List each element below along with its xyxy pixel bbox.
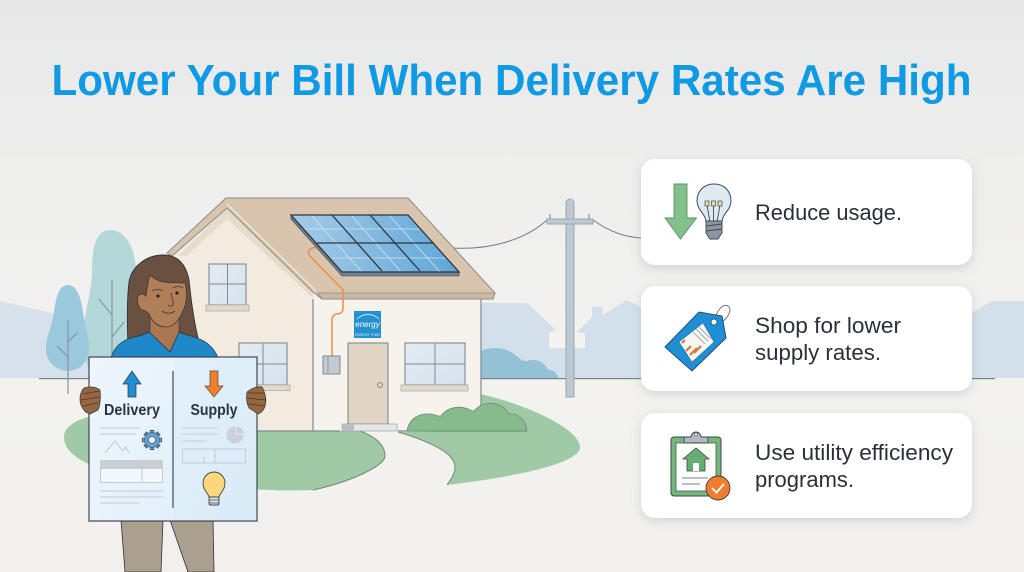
house walls xyxy=(100,208,527,431)
down arrow xyxy=(205,371,223,397)
face xyxy=(137,275,187,327)
trees xyxy=(46,230,146,394)
shirt xyxy=(111,332,218,358)
text xyxy=(755,440,953,492)
neck xyxy=(150,316,179,352)
door xyxy=(342,343,397,431)
energy star label xyxy=(354,311,381,338)
card: use utility efficiency programs xyxy=(641,413,972,518)
lower left window xyxy=(236,343,290,390)
card: reduce usage xyxy=(641,159,972,265)
energy star label: ENERGY STAR xyxy=(355,333,380,337)
text: Shop for lower xyxy=(755,313,901,338)
utility pole and wires xyxy=(453,199,641,397)
gable trim xyxy=(178,208,313,298)
text: Use utility efficiency xyxy=(755,440,953,465)
right hand xyxy=(247,387,266,414)
hair xyxy=(127,255,199,345)
roof xyxy=(167,198,495,299)
delivery column xyxy=(100,371,163,503)
icon: clipboard with house xyxy=(671,432,730,500)
icon: down arrow xyxy=(665,184,696,239)
orange wire xyxy=(309,248,343,356)
text xyxy=(755,313,901,365)
up arrow xyxy=(123,371,141,397)
person holding bill xyxy=(80,255,266,572)
electric meter xyxy=(323,356,340,374)
card: shop for lower supply rates xyxy=(641,286,972,391)
legs xyxy=(121,520,214,572)
supply label: Supply xyxy=(190,402,238,419)
gear icon xyxy=(142,430,162,450)
icon: light bulb xyxy=(697,184,731,239)
left hand xyxy=(80,387,100,414)
text: programs. xyxy=(755,467,854,492)
icon: price tag xyxy=(665,305,730,371)
bill board xyxy=(89,357,257,521)
delivery label: Delivery xyxy=(104,402,160,419)
shrub xyxy=(407,403,527,431)
lower right window xyxy=(401,343,468,391)
upper window xyxy=(206,264,249,311)
solar panels xyxy=(291,215,459,276)
background scenery xyxy=(0,300,1024,379)
text: supply rates. xyxy=(755,340,881,365)
pie icon xyxy=(226,426,245,444)
light bulb xyxy=(203,472,225,505)
text: Reduce usage. xyxy=(755,200,902,225)
lawn xyxy=(64,394,580,490)
title: Lower Your Bill When Delivery Rates Are High xyxy=(52,56,972,105)
house xyxy=(100,198,527,431)
supply column xyxy=(182,371,246,505)
energy star label: energy xyxy=(355,320,381,329)
